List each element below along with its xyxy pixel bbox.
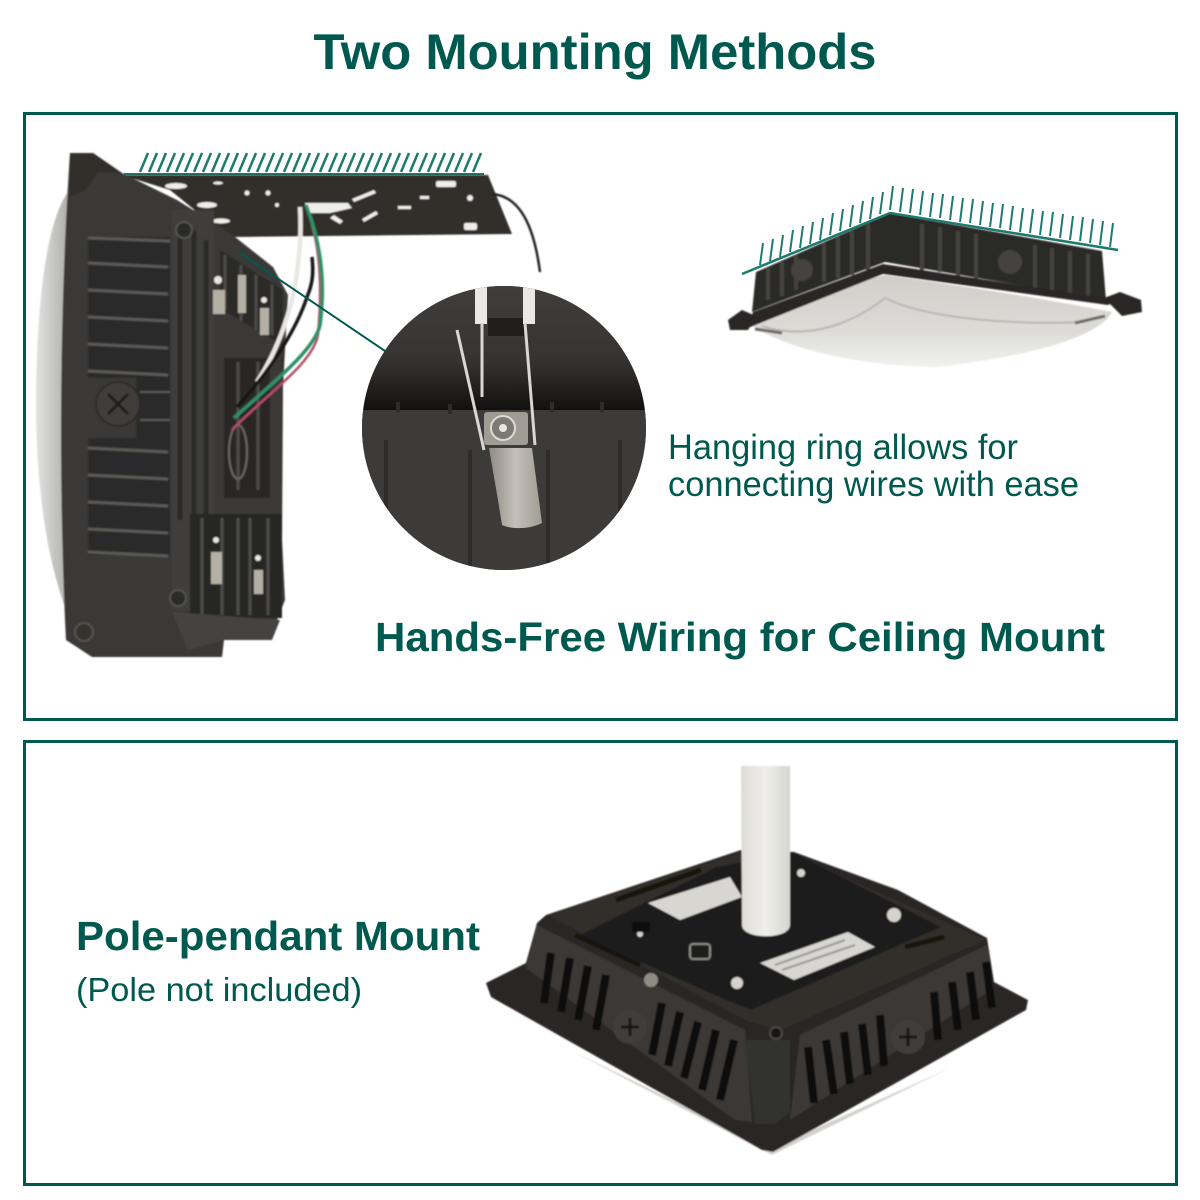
vertical fins, centre and right [172,210,283,650]
screws [613,1010,647,1044]
heading: hands-free wiring: Hands-Free Wiring for Ceiling Mount [375,614,1105,660]
horizontal fins [86,237,170,556]
text: hanging ring note [668,428,1079,504]
panel: ceiling mount [24,114,1176,720]
inset: hanging ring close-up [362,284,646,570]
fixture body [486,850,1028,1152]
ground wire loop [492,194,540,272]
clips [211,275,269,594]
lens edge [570,1050,950,1155]
icon: ceiling hatch, angled view [742,186,1118,274]
screw [96,382,140,426]
pole [741,766,790,936]
wires [232,205,322,430]
side walls [526,925,752,1122]
icon: fixture with pole [486,766,1028,1155]
fins [544,953,992,1103]
panel: pole-pendant mount [24,742,1176,1184]
callout leader line [240,253,385,351]
labels [648,877,742,920]
mounting bracket [122,175,512,237]
icon: fixture hanging from bracket [36,153,540,657]
text: hanging ring note: Hanging ring allows for [668,428,1018,467]
fixture body [61,153,288,657]
title: Two Mounting Methods [314,24,876,80]
top plate [548,852,985,1030]
icon: ceiling hatch, side view [124,153,484,174]
lens, side [36,192,72,625]
icon: fixture, angled view with lens [728,213,1142,367]
heading: pole-pendant mount: Pole-pendant Mount [76,913,480,959]
text: hanging ring note: connecting wires with ease [668,465,1079,504]
text: pole note: (Pole not included) [76,971,362,1008]
